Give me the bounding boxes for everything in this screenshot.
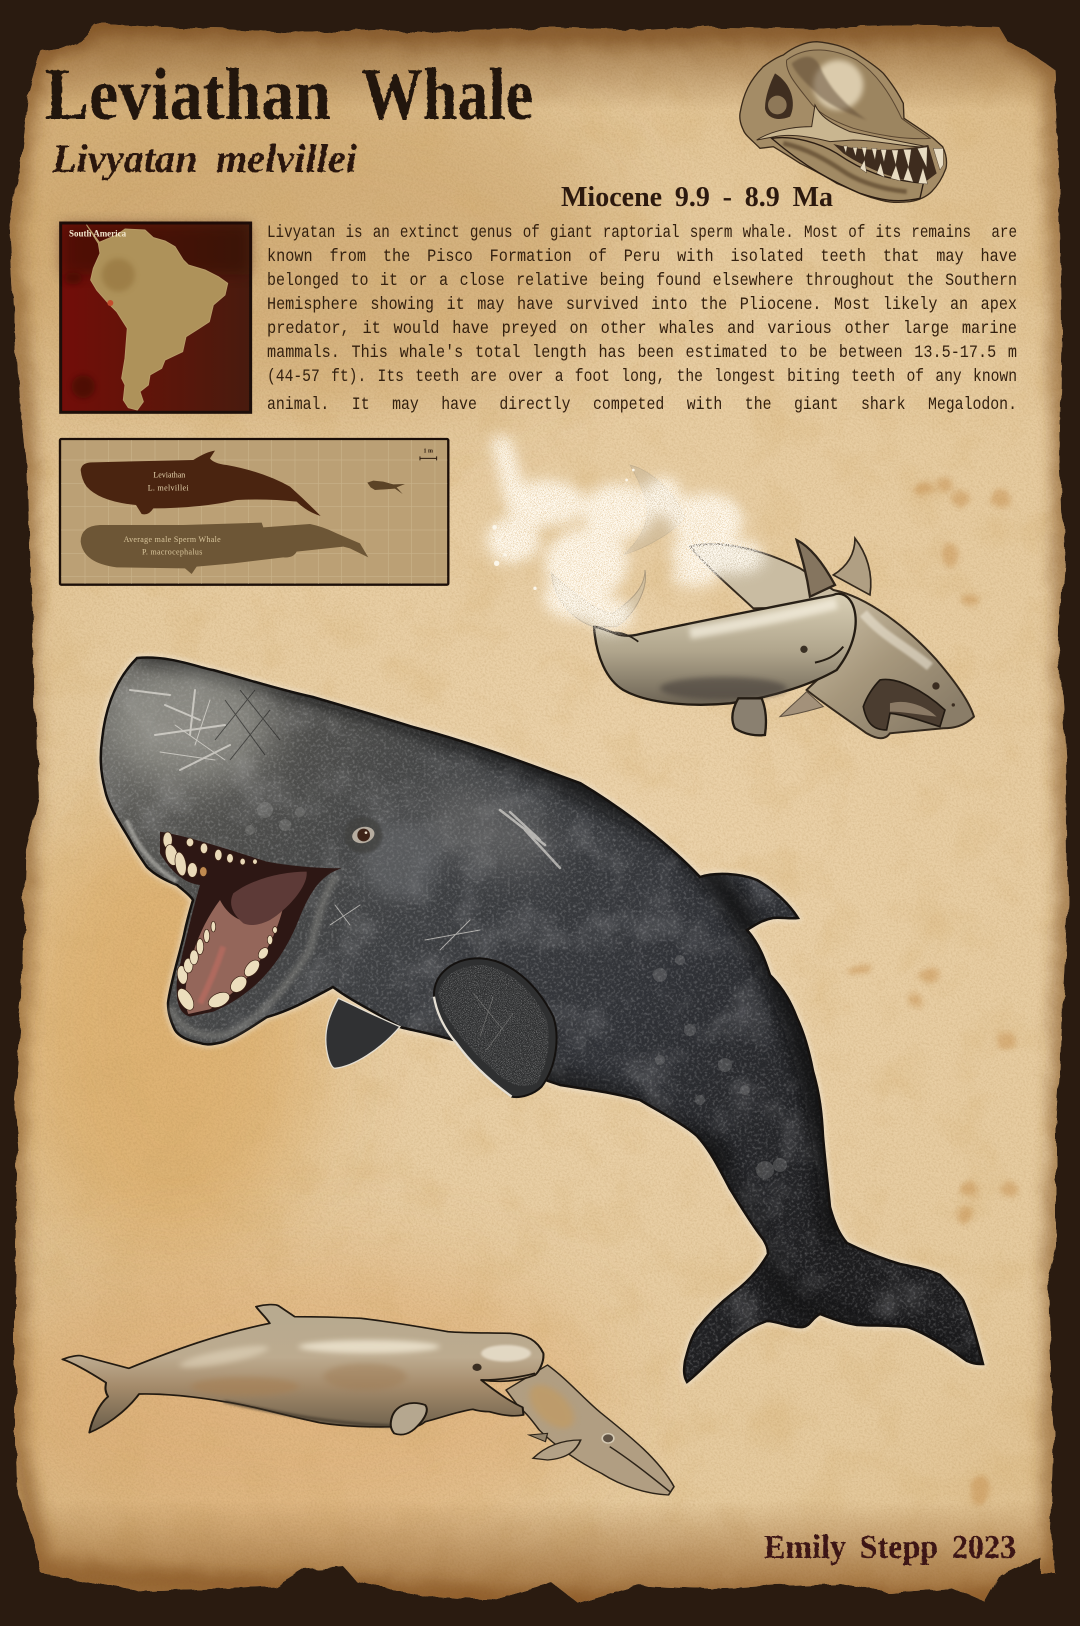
subtitle: Livyatan melvillei: [51, 136, 357, 181]
age stains right: [846, 478, 1019, 1506]
whale body: [101, 658, 983, 1382]
Pisco Formation marker: [107, 300, 113, 306]
teeth: [843, 146, 943, 184]
sperm whale flipper: [732, 698, 766, 735]
front flipper: [434, 958, 557, 1097]
artist signature: Emily Stepp 2023: [764, 1529, 1016, 1566]
size comparison chart: P. macrocephalus: [142, 548, 203, 557]
mouth floor: [186, 900, 283, 1014]
size comparison chart: L. melvillei: [148, 484, 189, 493]
tongue: [231, 872, 307, 925]
title: Whale: [361, 54, 533, 136]
South America landmass: [87, 225, 228, 410]
head highlights: [105, 665, 275, 785]
spray droplets: [492, 469, 635, 590]
mouth: [833, 144, 937, 183]
Leviathan silhouette: [81, 451, 321, 516]
sperm whale body: [594, 594, 856, 705]
whale eating smaller whale illustration: [62, 1305, 674, 1495]
cloudy skin mottling: [101, 658, 983, 1382]
eye socket: [765, 73, 793, 119]
skull drawing: [740, 42, 947, 202]
sperm whale silhouette: [81, 523, 368, 574]
size comparison chart: [60, 439, 448, 585]
back and tail shading: [137, 650, 835, 1240]
shark eye: [932, 682, 940, 690]
upper shark tail: [623, 465, 685, 555]
jaw: [772, 138, 923, 201]
shading: [813, 60, 863, 110]
map frame: [61, 223, 251, 412]
orange wash lower left: [20, 800, 320, 1260]
whale white halo: [101, 658, 983, 1382]
rear flipper: [326, 998, 400, 1068]
period label: Miocene 9.9 - 8.9 Ma: [561, 181, 833, 213]
sperm whale flukes: [552, 570, 646, 627]
eye: [344, 817, 383, 853]
shark pectoral fin: [780, 692, 823, 717]
chart frame: [60, 439, 448, 585]
white water spray: [487, 437, 765, 632]
upper teeth: [163, 832, 257, 877]
skull outline: [740, 42, 947, 202]
small whale prey: [506, 1365, 674, 1495]
sperm whale eye and mouth: [800, 646, 808, 653]
map panel: [61, 223, 251, 412]
spray and shark attack scene: [487, 437, 974, 738]
Leviathan label: Leviathan: [153, 471, 185, 480]
whale outline: [101, 658, 983, 1382]
big whale eye and mouth: [472, 1364, 482, 1371]
diver silhouette: [367, 481, 405, 494]
scale bar: 1 m: [424, 448, 433, 454]
mouth interior: [160, 832, 342, 1017]
title: [45, 54, 533, 136]
cranium: [786, 50, 930, 139]
whale skin texture: [101, 658, 983, 1382]
title: Leviathan: [45, 54, 331, 136]
body text: [267, 223, 1017, 415]
jaw highlights: [170, 875, 337, 1036]
big whale flipper: [391, 1403, 427, 1435]
scars: [130, 690, 560, 950]
sperm whale highlights: [690, 603, 837, 633]
big whale body: [62, 1305, 543, 1433]
main Leviathan whale illustration: [101, 650, 985, 1382]
skin spots: [245, 802, 787, 1179]
highlights: [299, 1340, 440, 1353]
scale bar: [420, 448, 437, 460]
sperm whale label: Average male Sperm Whale: [124, 535, 221, 544]
shark body: [690, 544, 974, 738]
shark dorsal fins: [797, 540, 835, 597]
map label: South America: [69, 229, 127, 239]
lower teeth: [174, 921, 277, 1013]
small whale flipper: [533, 1440, 581, 1460]
shark mouth: [863, 679, 945, 730]
